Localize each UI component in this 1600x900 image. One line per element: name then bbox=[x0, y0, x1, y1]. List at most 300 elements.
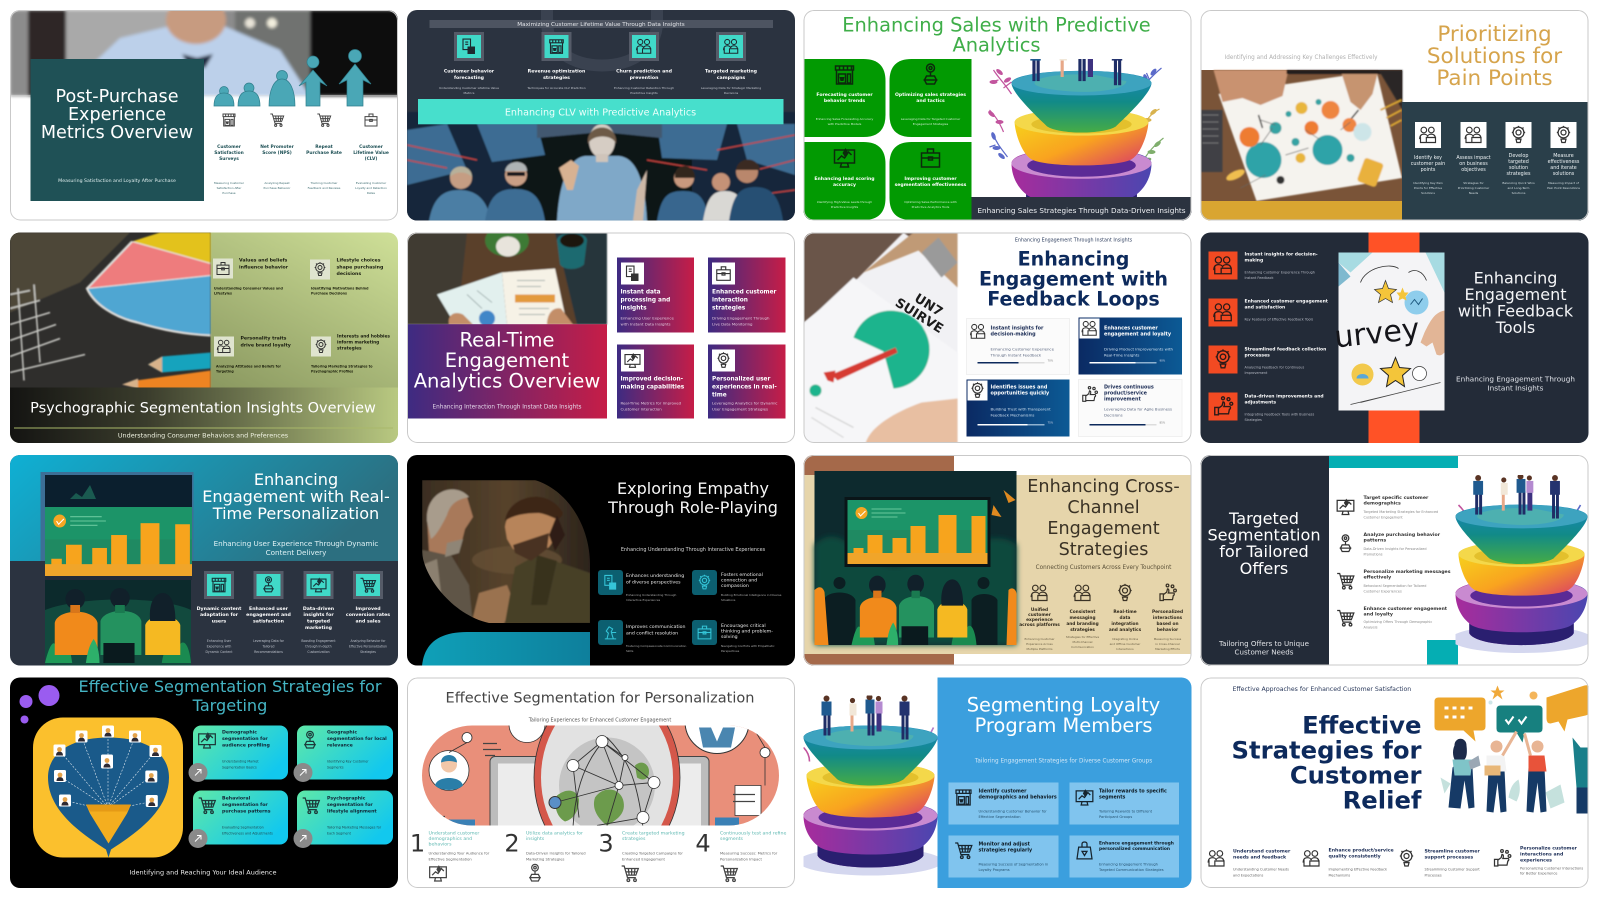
targeting list: Customer Experiences bbox=[1364, 590, 1402, 594]
four value items: drive brand loyalty bbox=[240, 342, 291, 348]
four metric columns: Score (NPS) bbox=[262, 150, 292, 156]
panel: cross-channel engagement slide bbox=[804, 455, 1192, 666]
four program tiles: Enhancing Engagement Through bbox=[1099, 862, 1158, 866]
four strategy items: support processes bbox=[1424, 854, 1473, 860]
four feedback tiles: opportunities quickly bbox=[990, 390, 1050, 396]
photo: analysts around holographic screens bbox=[407, 112, 795, 222]
dark panel with four steps: Pain Point Resolutions bbox=[1547, 186, 1580, 190]
four feature columns: through In-depth bbox=[305, 644, 332, 648]
four strategy items: needs and feedback bbox=[1233, 854, 1287, 860]
green feature tiles: Enhancing Sales Forecasting Accuracy bbox=[816, 117, 874, 121]
subtitle: Tailoring Experiences for Enhanced Customer Engagement bbox=[528, 718, 671, 724]
blue content panel bbox=[938, 678, 1192, 888]
green feature tiles: segmentation effectiveness bbox=[895, 182, 967, 188]
four gradient tiles: Customer Interaction bbox=[620, 406, 662, 412]
four feature columns: marketing bbox=[305, 625, 332, 631]
title: Channel bbox=[1067, 498, 1140, 518]
four feature icons and labels: Targeted marketing bbox=[705, 68, 757, 74]
four value items: influence behavior bbox=[239, 264, 289, 270]
subtitle: Content Delivery bbox=[266, 548, 327, 557]
four gradient tiles: Improved decision- bbox=[620, 376, 684, 382]
green feature tiles: Predictive Insights bbox=[831, 205, 859, 209]
photo: survey paper with gauge and pencil: SUIRVE bbox=[892, 296, 946, 337]
four strategy columns: customer bbox=[1028, 612, 1052, 618]
funnel illustration bbox=[1451, 474, 1592, 653]
four strategy items: Implementing Effective Feedback bbox=[1328, 868, 1388, 872]
four numbered steps: behaviors bbox=[428, 842, 452, 848]
targeting list: Analyze purchasing behavior bbox=[1364, 532, 1441, 538]
four strategy columns: integration bbox=[1111, 621, 1139, 627]
four feedback tiles: Real-Time Insights bbox=[1104, 352, 1139, 358]
four value items: Values and beliefs bbox=[239, 258, 288, 264]
four program tiles: Enhance engagement through bbox=[1099, 840, 1174, 846]
four strategy columns: interactions bbox=[1153, 615, 1183, 621]
four strategy columns: across platforms bbox=[1019, 622, 1060, 628]
four numbered steps: 2 bbox=[504, 830, 520, 858]
four numbered steps: insights bbox=[526, 836, 545, 842]
four segmentation tiles: Geographic bbox=[327, 730, 357, 736]
gradient title panel: Real-Time bbox=[459, 328, 555, 352]
four metric columns: Evaluating Customer bbox=[356, 181, 387, 185]
title: Targeting bbox=[192, 696, 267, 715]
four feature columns: insights for bbox=[303, 612, 334, 618]
subtitle: Tailoring Engagement Strategies for Diverse Customer Groups bbox=[974, 758, 1152, 764]
four gradient tiles: Enhancing User Experience bbox=[620, 316, 675, 320]
four program tiles: Monitor and adjust bbox=[978, 842, 1031, 848]
four metric columns: Tracking Customer bbox=[310, 181, 338, 185]
four segmentation tiles: Segments bbox=[327, 766, 344, 770]
four numbered steps: demographics and bbox=[428, 836, 472, 842]
dark panel with four steps: Identify key bbox=[1414, 155, 1442, 161]
four numbered steps: Understand customer bbox=[428, 830, 479, 836]
green feature tiles: Identifying High-Value Leads through bbox=[817, 200, 872, 204]
gradient title panel bbox=[407, 324, 607, 418]
dark panel with four steps: Solutions bbox=[1421, 191, 1435, 195]
photo: businessman with rising figures bbox=[10, 0, 400, 106]
four strategy columns: in Cross-Channel bbox=[1155, 642, 1180, 646]
green feature tiles: Leveraging Data for Targeted Customer bbox=[901, 117, 961, 121]
four strategy items: Enhance product/service bbox=[1328, 848, 1394, 854]
panel: feedback tools slide bbox=[1200, 232, 1588, 444]
four numbered steps: Utilize data analytics for bbox=[526, 830, 583, 836]
four feature icons and labels: Churn prediction and bbox=[616, 68, 672, 74]
four segmentation tiles: segmentation for bbox=[222, 736, 268, 742]
photo: survey paper with gauge and pencil: UN7 bbox=[911, 291, 945, 320]
four strategy columns: Unified bbox=[1031, 607, 1048, 613]
subtitle: Enhancing Engagement Through bbox=[1456, 374, 1575, 384]
four gradient tiles: Live Data Monitoring bbox=[712, 322, 753, 326]
four benefit items: Navigating Conflicts with Empathetic bbox=[721, 644, 775, 648]
four gradient tiles: Instant data bbox=[620, 290, 661, 296]
four numbered steps: Data-Driven Insights for Tailored bbox=[526, 852, 586, 856]
title: Analytics bbox=[952, 34, 1041, 56]
four feature columns: Effective Personalization bbox=[349, 644, 387, 648]
four numbered steps: Understanding Your Audience for bbox=[428, 852, 490, 856]
four feature icons and labels: Understanding Customer Lifetime Value bbox=[439, 86, 499, 90]
four benefit items: Situations bbox=[721, 598, 736, 602]
title: Solutions for bbox=[1427, 44, 1562, 69]
targeting list: Customer Engagement bbox=[1364, 516, 1403, 520]
title: Strategies bbox=[1059, 540, 1148, 560]
panel: customer relief strategies slide bbox=[1200, 678, 1590, 888]
four feature columns: Experience with bbox=[207, 644, 231, 648]
feedback list: Enhanced customer engagement bbox=[1244, 298, 1329, 304]
header band: Maximizing Customer Lifetime Value Through Data Insights bbox=[517, 22, 685, 28]
title: Enhancing bbox=[1018, 248, 1129, 270]
dark panel with four steps: customer pain bbox=[1411, 161, 1445, 167]
four value items: Lifestyle choices bbox=[336, 258, 381, 264]
four strategy columns: messaging bbox=[1069, 615, 1096, 621]
four metric columns: Measuring Customer bbox=[214, 181, 245, 185]
four strategy columns: experience bbox=[1026, 617, 1053, 623]
four feature columns: Recommendations bbox=[254, 650, 283, 654]
four feature icons and labels: strategies bbox=[543, 75, 570, 81]
four metric columns: Loyalty and Retention bbox=[355, 186, 387, 190]
four strategy columns: behavior bbox=[1157, 627, 1179, 633]
targeting list: Enhance customer engagement bbox=[1364, 606, 1448, 612]
four feature columns: and sales bbox=[355, 618, 381, 624]
four benefit items: thinking and problem- bbox=[721, 628, 773, 634]
four feature icons and labels: Techniques for Accurate CLV Prediction bbox=[526, 86, 586, 90]
four metric columns: Lifetime Value bbox=[353, 150, 389, 156]
four segmentation tiles: segmentation for bbox=[222, 802, 268, 808]
feedback list: Data-driven improvements and bbox=[1244, 394, 1324, 400]
dark title panel: Customer Needs bbox=[1235, 648, 1294, 656]
four strategy columns: data bbox=[1120, 615, 1131, 621]
four feature icons and labels: Predictive Insights bbox=[630, 91, 658, 95]
title: Prioritizing bbox=[1437, 22, 1552, 47]
four program tiles: segments bbox=[1099, 794, 1126, 800]
four feature columns: Customization bbox=[307, 650, 330, 654]
dark panel with four steps: strategies bbox=[1507, 171, 1531, 177]
illustration: audience watching a chart bbox=[814, 471, 1016, 645]
four gradient tiles: Enhanced customer bbox=[712, 290, 777, 296]
four strategy items bbox=[1208, 846, 1583, 878]
four benefit items: Enhances understanding bbox=[626, 573, 684, 579]
dark panel with four steps: points bbox=[1421, 167, 1436, 173]
feedback list: Enhancing Customer Experience Through bbox=[1244, 270, 1315, 274]
four feature columns: Tailored bbox=[262, 644, 275, 648]
four gradient tiles: making capabilities bbox=[620, 384, 685, 390]
four value items: Personality traits bbox=[240, 336, 287, 342]
four benefit items: of diverse perspectives bbox=[626, 580, 681, 586]
four feedback tiles: improvement bbox=[1104, 396, 1141, 402]
panel: effective segmentation strategies slide bbox=[10, 677, 398, 888]
four benefit items: Fosters emotional bbox=[721, 572, 763, 578]
four strategy columns: based on bbox=[1156, 621, 1179, 627]
four gradient tiles: Driving Engagement Through bbox=[712, 316, 770, 320]
gradient title panel: Enhancing Interaction Through Instant Data Insights bbox=[433, 404, 581, 410]
dark panel with four steps: Prioritizing Customer bbox=[1458, 186, 1490, 190]
panel: psychographic segmentation slide bbox=[10, 232, 398, 444]
subtitle: Enhancing Understanding Through Interactive Experiences bbox=[621, 547, 766, 553]
four metric columns bbox=[214, 114, 389, 195]
teal title panel bbox=[30, 59, 204, 201]
four value items: Analyzing Attitudes and Beliefs for bbox=[216, 364, 281, 368]
four feedback tiles: 75% bbox=[1048, 420, 1054, 424]
four feature columns: engagement and bbox=[246, 612, 291, 618]
four feedback tiles bbox=[966, 318, 1182, 436]
dark panel with four steps: on business bbox=[1459, 161, 1488, 167]
four strategy items: Streamlining Customer Support bbox=[1424, 868, 1480, 872]
teal accent blocks bbox=[1329, 455, 1458, 666]
four segmentation tiles: Understanding Market bbox=[222, 760, 259, 764]
four strategy columns: Experience Across bbox=[1026, 642, 1053, 646]
four segmentation tiles: Tailoring Marketing Messages for bbox=[326, 826, 382, 830]
four strategy columns: Marketing Efforts bbox=[1155, 647, 1180, 651]
dark panel with four steps: Measuring Impact of bbox=[1548, 181, 1580, 185]
teal headline bar: Enhancing CLV with Predictive Analytics bbox=[505, 108, 696, 118]
dark panel with four steps: Solutions bbox=[1512, 191, 1526, 195]
four program tiles: strategies regularly bbox=[978, 848, 1033, 854]
four gradient tiles: insights bbox=[620, 306, 647, 312]
title: Metrics Overview bbox=[41, 123, 193, 143]
dark title panel: Segmentation bbox=[1207, 526, 1321, 544]
four metric columns: Satisfaction bbox=[214, 150, 244, 156]
dark panel with four steps: targeted bbox=[1508, 159, 1529, 165]
dark panel with four steps: Measure bbox=[1553, 153, 1574, 159]
targeting list bbox=[1337, 495, 1451, 630]
gradient title panel: Analytics Overview bbox=[414, 370, 600, 392]
subtitle: Enhancing User Experience Through Dynamic bbox=[214, 539, 378, 548]
four program tiles: personalized communication bbox=[1099, 846, 1170, 852]
four strategy items: Understanding Customer Needs bbox=[1233, 868, 1289, 872]
panel: segmenting loyalty members slide bbox=[798, 678, 1192, 888]
title: Time Personalization bbox=[212, 504, 379, 523]
four numbered steps: 4 bbox=[695, 830, 711, 858]
four feedback tiles: Drives continuous bbox=[1104, 384, 1154, 390]
four metric columns: Surveys bbox=[219, 156, 239, 162]
dark panel with four steps: effectiveness bbox=[1548, 159, 1580, 165]
four feedback tiles: Through Instant Feedback bbox=[990, 352, 1042, 358]
targeting list: patterns bbox=[1364, 538, 1386, 544]
title: Post-Purchase bbox=[55, 87, 179, 107]
four strategy columns: Multiple Platforms bbox=[1026, 647, 1053, 651]
panel: CLV predictive analytics slide bbox=[407, 0, 795, 222]
four feature icons and labels: Enhancing Customer Retention Through bbox=[614, 86, 674, 90]
four gradient tiles: Real-Time Metrics for Improved bbox=[620, 400, 682, 406]
four numbered steps: 1 bbox=[410, 830, 425, 858]
dark panel with four steps: Develop bbox=[1509, 153, 1528, 159]
illustration: team with speech bubbles bbox=[1432, 678, 1590, 818]
four feature columns: Dynamic Content bbox=[206, 650, 233, 654]
four segmentation tiles: audience profiling bbox=[222, 742, 270, 748]
feedback list: Instant Feedback bbox=[1244, 276, 1274, 280]
bottom title band bbox=[10, 388, 398, 444]
four feature columns: targeted bbox=[307, 618, 330, 624]
four feedback tiles: Decisions bbox=[1104, 412, 1123, 418]
targeting list: Promotions bbox=[1364, 552, 1383, 556]
targeting list: Data-Driven Insights for Personalized bbox=[1364, 547, 1427, 551]
four value items: Understanding Consumer Values and bbox=[214, 286, 283, 290]
four benefit items: Improves communication bbox=[626, 624, 685, 630]
four strategy columns bbox=[1019, 584, 1183, 651]
four feature icons and labels: Revenue optimization bbox=[528, 68, 585, 74]
feedback list: Improvement bbox=[1244, 371, 1268, 375]
four feature columns: conversion rates bbox=[346, 612, 390, 618]
four feedback tiles: Instant insights for bbox=[990, 326, 1044, 332]
four feature columns: Boosting Engagement bbox=[301, 639, 336, 643]
four strategy columns: and branding bbox=[1066, 621, 1099, 627]
caption: Identifying and Reaching Your Ideal Audience bbox=[130, 868, 276, 876]
photo: survey sketch with hand: urvey bbox=[1333, 312, 1421, 355]
four program tiles: Measuring Success of Segmentation in bbox=[978, 862, 1048, 866]
four value items bbox=[213, 258, 390, 374]
targeting list: Targeted Marketing Strategies for Enhanced bbox=[1362, 510, 1438, 514]
four strategy columns: Communication bbox=[1071, 645, 1094, 649]
four feature icons and labels bbox=[439, 32, 761, 95]
four program tiles: Identify customer bbox=[978, 788, 1027, 794]
four strategy columns: Integrating Online bbox=[1112, 637, 1138, 641]
four strategy columns: Consistent bbox=[1070, 609, 1095, 615]
four feedback tiles: Feedback Mechanisms bbox=[990, 412, 1034, 418]
title: Engagement bbox=[1047, 519, 1160, 539]
four strategy items: Personalizing Customer Interactions bbox=[1520, 866, 1583, 870]
dark title panel: Offers bbox=[1240, 559, 1288, 578]
photo: chalk pie chart and pencils bbox=[10, 232, 210, 388]
four strategy items: quality consistently bbox=[1328, 854, 1381, 860]
subtitle: Effective Approaches for Enhanced Customer Satisfaction bbox=[1232, 686, 1411, 693]
feedback list: making bbox=[1244, 258, 1263, 264]
four metric columns: (CLV) bbox=[365, 156, 377, 162]
four feedback tiles: Building Trust with Transparent bbox=[990, 406, 1051, 412]
feedback list: Streamlined feedback collection bbox=[1244, 346, 1326, 352]
green feature tiles: with Predictive Models bbox=[828, 122, 862, 126]
four feedback tiles: 85% bbox=[1160, 420, 1166, 424]
title: Strategies for bbox=[1232, 736, 1422, 764]
four benefit items: Interactive Experiences bbox=[626, 598, 661, 602]
four metric columns: Satisfaction After bbox=[217, 186, 242, 190]
header band bbox=[430, 20, 773, 28]
dark title panel bbox=[1200, 455, 1329, 666]
four segmentation tiles: Behavioral bbox=[222, 796, 251, 802]
four strategy columns: Strategies for Effective bbox=[1066, 635, 1099, 639]
four segmentation tiles: segmentation for bbox=[327, 802, 373, 808]
four program tiles: Tailoring Rewards to Different bbox=[1098, 810, 1153, 814]
dark panel with four steps: Assess impact bbox=[1456, 155, 1491, 161]
four strategy items: Understand customer bbox=[1233, 848, 1291, 854]
four numbered steps: Create targeted marketing bbox=[622, 830, 685, 836]
four numbered steps: 3 bbox=[598, 830, 614, 858]
four feature columns bbox=[197, 571, 390, 654]
four benefit items: Building Emotional Intelligence in Diverse bbox=[721, 593, 782, 597]
dark panel with four steps: Points for Effective bbox=[1414, 186, 1442, 190]
beige and brown background blocks bbox=[804, 455, 1192, 666]
four segmentation tiles: Each Segment bbox=[327, 832, 352, 836]
targeting list: Target specific customer bbox=[1364, 495, 1429, 501]
funnel illustration bbox=[988, 59, 1164, 197]
four gradient tiles: User Engagement Strategies bbox=[712, 406, 768, 412]
four metric columns: Net Promoter bbox=[260, 144, 295, 150]
four strategy columns: Personalized bbox=[1152, 609, 1183, 615]
title: Enhancing bbox=[254, 470, 338, 489]
four strategy columns: Interactions bbox=[1116, 647, 1134, 651]
title: Tools bbox=[1495, 318, 1535, 337]
green feature tiles: Optimizing sales strategies bbox=[895, 92, 966, 98]
four value items: inform marketing bbox=[337, 340, 379, 346]
photo: hands sketching a mind map bbox=[1200, 70, 1402, 201]
four value items: Psychographic Profiles bbox=[311, 370, 353, 374]
four gradient tiles: strategies bbox=[712, 306, 746, 312]
four feature columns: Enhanced user bbox=[249, 606, 289, 612]
panel: empathy role-playing slide bbox=[407, 455, 795, 666]
title: Enhancing Cross- bbox=[1027, 477, 1180, 497]
four numbered steps: Marketing Strategies bbox=[526, 858, 564, 862]
four feature columns: satisfaction bbox=[253, 618, 284, 624]
title: Engagement with bbox=[979, 268, 1168, 290]
panel: real-time personalization slide bbox=[10, 455, 398, 666]
title: Enhancing Sales with Predictive bbox=[842, 14, 1151, 36]
four numbered steps: Effective Segmentation bbox=[428, 858, 472, 862]
four segmentation tiles: Psychographic bbox=[327, 796, 366, 802]
four segmentation tiles: Evaluating Segmentation bbox=[222, 826, 264, 830]
four feature icons and labels: Metrics bbox=[464, 91, 475, 95]
four value items: strategies bbox=[337, 346, 362, 352]
four feature columns: Strategies bbox=[360, 650, 376, 654]
four gradient tiles: Leveraging Analytics for Dynamic bbox=[712, 400, 778, 406]
four feature icons and labels: Customer behavior bbox=[444, 68, 495, 74]
targeting list: effectively bbox=[1364, 574, 1391, 580]
four segmentation tiles: Demographic bbox=[222, 730, 257, 736]
green feature tiles: Engagement Strategies bbox=[913, 122, 949, 126]
four numbered steps bbox=[410, 830, 786, 882]
four benefit items bbox=[598, 570, 782, 653]
four metric columns: Purchase Behavior bbox=[264, 186, 291, 190]
four feature icons and labels: campaigns bbox=[717, 75, 745, 81]
panel: post-purchase metrics slide bbox=[10, 0, 400, 220]
title: Effective bbox=[1302, 710, 1422, 740]
four feedback tiles: Leveraging Data for Agile Business bbox=[1104, 406, 1172, 412]
feedback list: adjustments bbox=[1244, 400, 1276, 406]
dark title panel: for Tailored bbox=[1219, 542, 1309, 561]
four numbered steps: Creating Targeted Campaigns for bbox=[622, 852, 683, 856]
four feature icons and labels: prevention bbox=[630, 75, 658, 81]
four program tiles bbox=[948, 782, 1179, 878]
panel: real-time engagement slide bbox=[407, 224, 795, 443]
targeting list: Analysis bbox=[1364, 626, 1378, 630]
panel: sales predictive analytics slide bbox=[804, 10, 1192, 225]
title: Effective Segmentation Strategies for bbox=[78, 677, 382, 696]
four strategy items: and Expectations bbox=[1233, 874, 1264, 878]
dark title panel: Tailoring Offers to Unique bbox=[1218, 639, 1309, 648]
targeting list: Optimizing Offers Through Demographic bbox=[1364, 620, 1432, 624]
four numbered steps: Continuously test and refine bbox=[720, 830, 786, 836]
four value items: shape purchasing bbox=[336, 264, 383, 270]
four strategy columns: Measuring Success bbox=[1154, 637, 1182, 641]
dark caption bar bbox=[972, 197, 1192, 221]
four benefit items: Fostering Compassionate Communication bbox=[626, 644, 687, 648]
four feedback tiles: decision-making bbox=[990, 332, 1036, 338]
title: Program Members bbox=[975, 714, 1152, 737]
four gradient tiles: experiences in real- bbox=[712, 384, 777, 390]
four segmentation tiles: lifestyle alignment bbox=[327, 808, 377, 814]
title: Segmenting Loyalty bbox=[967, 694, 1160, 716]
targeting list: demographics bbox=[1364, 500, 1401, 506]
title: with Feedback bbox=[1458, 302, 1574, 320]
title: Customer bbox=[1290, 760, 1422, 790]
four feature columns: Improved bbox=[355, 606, 381, 612]
four benefit items: and conflict resolution bbox=[626, 630, 678, 636]
photo: survey sketch with hand bbox=[1333, 252, 1444, 410]
feedback list: Strategies bbox=[1244, 418, 1262, 422]
title: Exploring Empathy bbox=[617, 479, 769, 498]
four benefit items: Encourages critical bbox=[721, 623, 766, 629]
four benefit items: compassion bbox=[721, 583, 749, 589]
illustration: dashboard and audience bbox=[40, 472, 194, 666]
photo: desk with notebook and coffee bbox=[407, 224, 607, 326]
four feedback tiles: Identifies issues and bbox=[990, 384, 1048, 390]
four strategy columns: Enhancing Customer bbox=[1024, 637, 1055, 641]
